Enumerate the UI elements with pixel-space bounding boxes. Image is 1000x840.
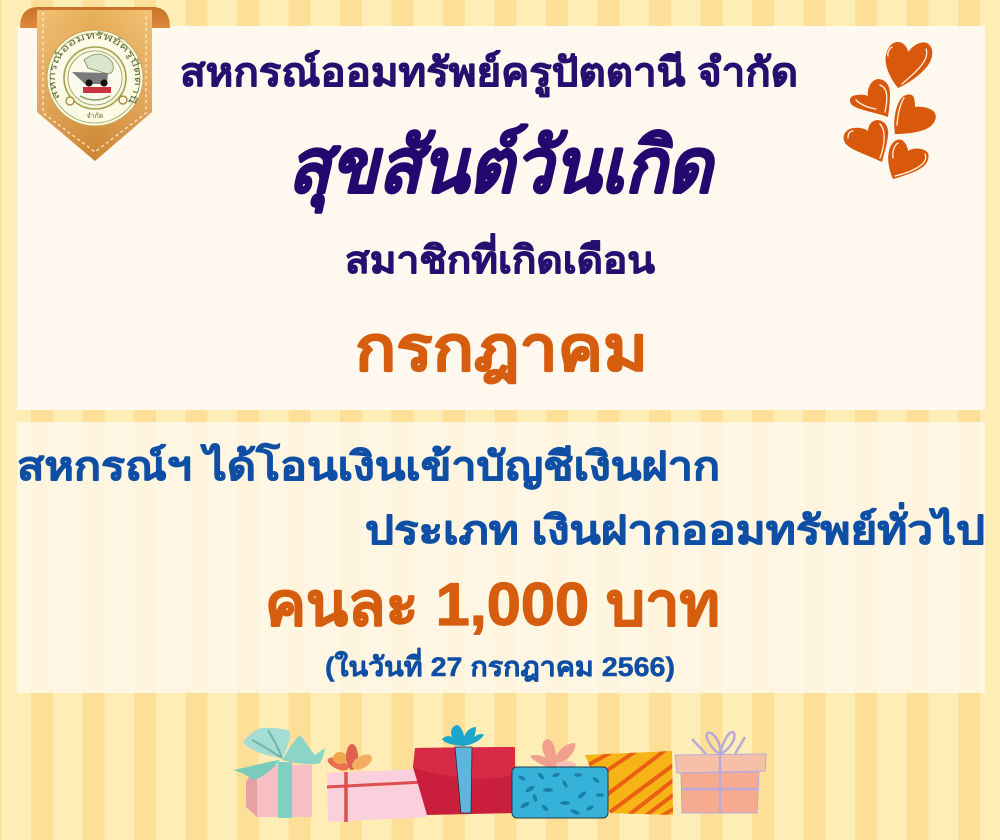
icon: red gift with blue ribbon <box>413 725 515 815</box>
icon: pink gift with teal bow <box>233 728 325 818</box>
icon: light pink gift with red ribbon <box>326 744 428 822</box>
panel: details <box>17 422 985 693</box>
icon: blue patterned gift <box>512 739 608 818</box>
icon: ribbon badge <box>20 7 170 161</box>
icon: cooperative seal: สหกรณ์ออมทรัพย์ครูปัตตานี <box>50 31 140 104</box>
date note: (ในวันที่ 27 กรกฎาคม 2566) <box>325 647 675 682</box>
panel: header <box>17 26 985 410</box>
icon: peach gift with lilac bow <box>675 732 766 813</box>
amount: คนละ 1,000 บาท <box>265 571 720 638</box>
icon: cooperative seal: จำกัด <box>87 112 103 120</box>
subheading: members born in month: สมาชิกที่เกิดเดือน <box>345 233 655 282</box>
heading: happy birthday: สุขสันต์วันเกิด <box>288 124 716 213</box>
icon: hearts <box>844 42 936 179</box>
month: กรกฎาคม <box>355 315 648 384</box>
icon: orange striped gift <box>585 751 673 815</box>
title: cooperative name: สหกรณ์ออมทรัพย์ครูปัตตานี จำกัด <box>180 50 798 97</box>
illustration: gift boxes <box>233 725 766 822</box>
text: transfer line 1: สหกรณ์ฯ ได้โอนเงินเข้าบัญชีเงินฝาก <box>17 443 720 490</box>
text: transfer line 2: ประเภท เงินฝากออมทรัพย์ทั่วไป <box>365 502 985 553</box>
